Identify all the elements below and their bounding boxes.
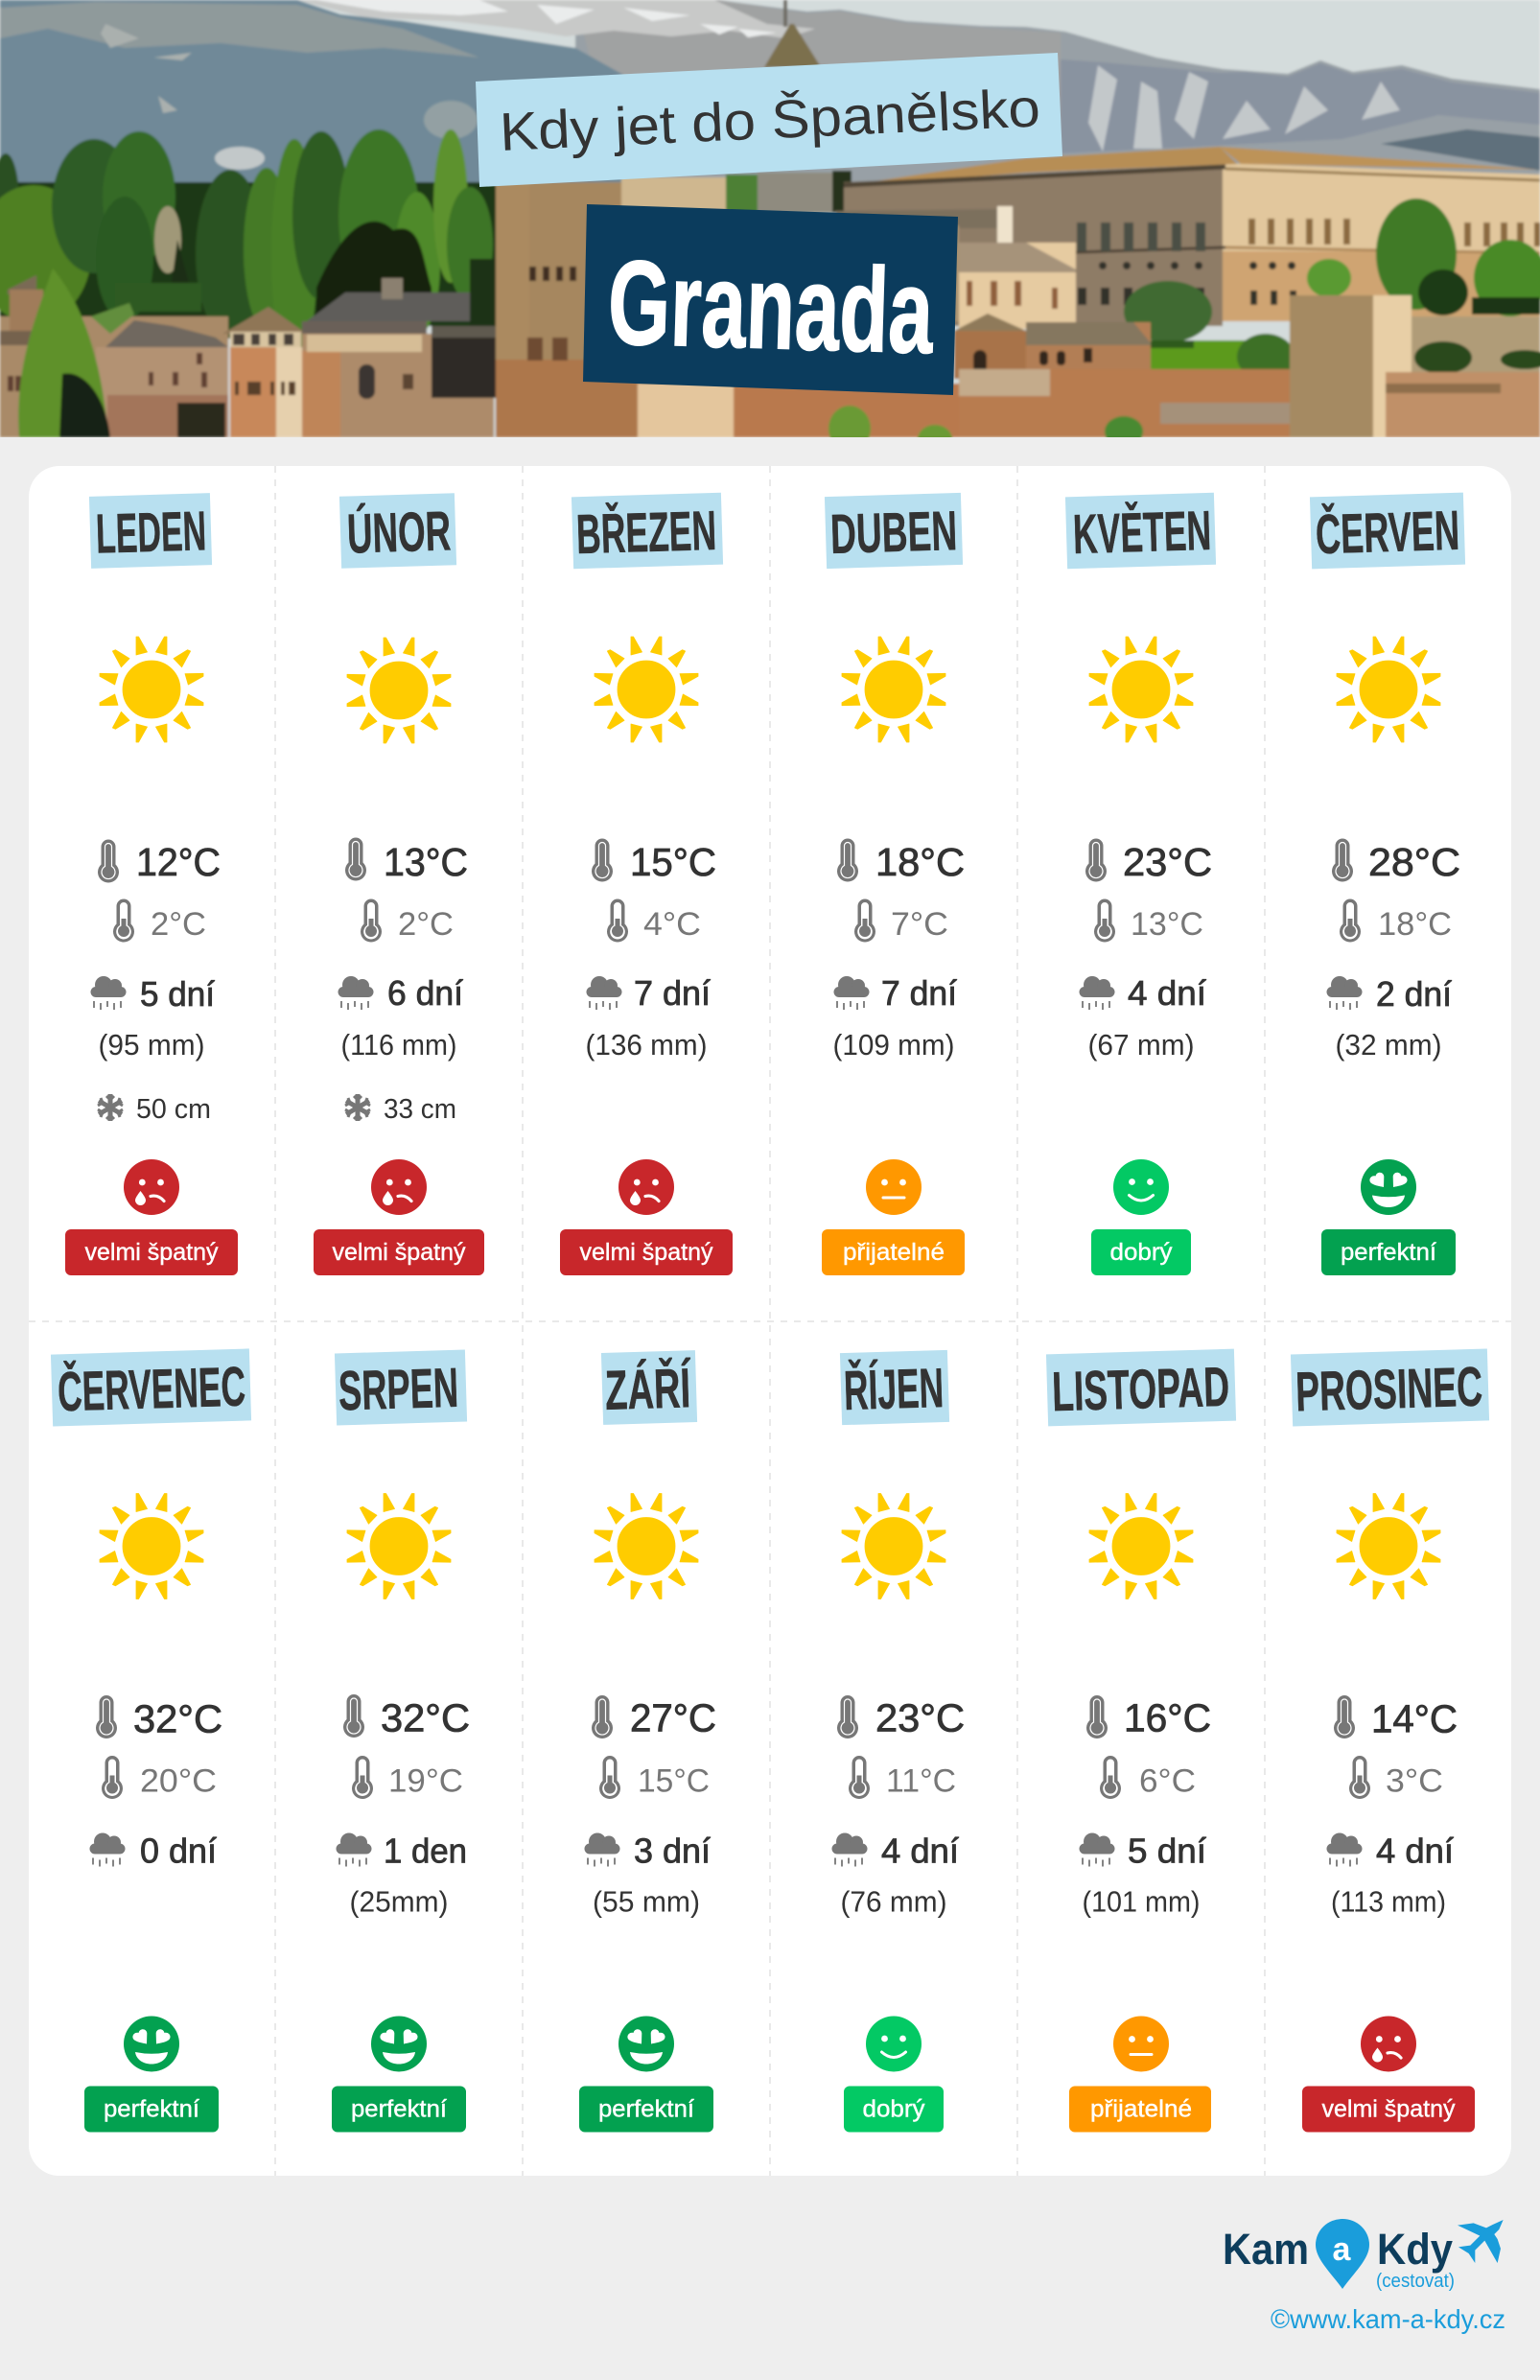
icon: sad face [371,1159,427,1215]
icon: thermometer low [599,1756,620,1799]
snowfall: 50 cm [136,1094,211,1125]
rain days: 7 dní [634,973,711,1013]
icon: thermometer high [837,838,858,882]
icon: thermometer low [849,1756,870,1799]
rating badge: velmi špatný [332,1239,466,1266]
low temperature: 20°C [140,1762,217,1799]
icon: rain cloud [1080,976,1114,1010]
month: únor [314,493,484,1275]
month: srpen [332,1349,470,2133]
high temperature: 18°C [875,840,965,884]
low temperature: 6°C [1139,1762,1196,1799]
icon: thermometer high [592,838,613,882]
icon: sad face [1361,2016,1416,2071]
precipitation: (55 mm) [593,1885,700,1918]
precipitation: (113 mm) [1331,1885,1446,1918]
month label: ÚNOR: ÚNOR [346,500,452,566]
month: prosinec [1291,1348,1489,2133]
icon: sun [595,637,698,742]
precipitation: (67 mm) [1087,1028,1195,1062]
icon: thermometer low [1349,1756,1370,1799]
month: duben [822,493,965,1275]
icon: thermometer high [345,838,366,881]
icon: rain cloud [338,976,374,1010]
rating badge: velmi špatný [579,1239,713,1266]
precipitation: (76 mm) [840,1885,947,1918]
icon: rain cloud [90,976,127,1010]
rating badge: perfektní [1341,1239,1436,1266]
month label: KVĚTEN [1065,493,1216,569]
precipitation: (95 mm) [98,1028,205,1062]
month: říjen [832,1350,965,2133]
month label: ZÁŘÍ [601,1350,697,1425]
icon: airplane [1458,2220,1504,2263]
low temperature: 15°C [638,1762,710,1799]
month label: ZÁŘÍ: ZÁŘÍ [604,1357,692,1422]
high temperature: 23°C [875,1695,965,1739]
rating badge: přijatelné [1090,2096,1192,2123]
month: červen [1310,493,1465,1275]
month: leden [65,493,238,1275]
icon: smiling face [866,2016,922,2071]
icon: sun [1089,637,1193,742]
icon: thermometer low [1094,899,1115,943]
rain days: 4 dní [881,1832,959,1870]
icon: location pin: a [1333,2231,1352,2268]
rating badge: přijatelné [843,1239,945,1266]
rating badge: perfektní [351,2096,447,2123]
icon: rain cloud [832,1833,867,1866]
precipitation: (109 mm) [832,1028,955,1062]
rain days: 3 dní [634,1832,711,1870]
rating badge [1302,2087,1475,2133]
rating badge [65,1229,238,1275]
month: březen [560,493,733,1275]
low temperature: 4°C [643,906,701,943]
icon: thermometer low [352,1756,373,1799]
rain days: 4 dní [1376,1832,1454,1870]
high temperature: 32°C [381,1695,470,1739]
month label: ŘÍJEN [840,1350,949,1425]
logo subtitle: (cestovat) [1376,2271,1455,2292]
icon: snowflake [345,1094,370,1121]
logo: Kam a Kdy [1223,2219,1505,2334]
rain days: 5 dní [1128,1832,1206,1870]
rain days: 6 dní [387,973,463,1013]
high temperature: 14°C [1371,1697,1458,1741]
icon: sun [347,638,451,743]
rain days: 1 den [384,1832,467,1870]
rating badge [1091,1229,1191,1275]
icon: thermometer low [1100,1756,1121,1799]
icon: sun [100,637,203,742]
icon: neutral face [866,1159,922,1215]
rating badge: velmi špatný [84,1239,219,1266]
rating badge: dobrý [1110,1239,1173,1266]
icon: sad face [618,1159,674,1215]
title banner: Kdy jet do Španělsko: Kdy jet do Španělsko [499,77,1041,162]
rain days: 5 dní [140,974,215,1014]
month: červenec [51,1348,251,2133]
icon: sun [1089,1494,1193,1599]
icon: rain cloud [1327,976,1362,1010]
rating badge: perfektní [598,2096,694,2123]
low temperature: 2°C [398,906,454,943]
icon: sun [1337,1494,1440,1599]
icon: thermometer low [854,899,875,943]
second row of months [51,1348,1489,2133]
low temperature: 11°C [886,1762,956,1799]
icon: sun [842,1494,945,1599]
high temperature: 16°C [1124,1695,1211,1739]
precipitation: (116 mm) [341,1028,456,1062]
icon: heart-eyes face [371,2016,427,2071]
panel: month grid card [29,466,1511,2176]
icon: rain cloud [1327,1833,1362,1866]
high temperature: 13°C [384,840,468,884]
low temperature: 2°C [151,906,206,943]
icon: smiling face [1113,1159,1169,1215]
high temperature: 27°C [630,1695,716,1739]
month label: ŘÍJEN: ŘÍJEN [843,1357,945,1422]
icon: location pin [1316,2219,1369,2289]
low temperature: 7°C [891,906,948,943]
rain days: 7 dní [881,973,957,1013]
month label: SRPEN [335,1349,467,1426]
icon: sun [842,637,945,742]
icon: thermometer high [96,1695,117,1738]
rating badge [560,1229,733,1275]
month label: LISTOPAD: LISTOPAD [1051,1356,1230,1423]
low temperature: 3°C [1386,1762,1443,1799]
icon: thermometer high [837,1695,858,1738]
month label: ČERVEN [1310,493,1465,569]
month: květen [1065,493,1216,1275]
icon: rain cloud [1080,1833,1114,1866]
icon: thermometer high [592,1695,613,1738]
icon: sun [347,1494,451,1599]
month label: LISTOPAD [1046,1349,1236,1426]
month label: LEDEN [89,493,212,569]
precipitation: (136 mm) [585,1028,708,1062]
icon: thermometer low [607,899,628,943]
snowfall: 33 cm [384,1094,456,1125]
icon: sad face [124,1159,179,1215]
icon: thermometer low [361,899,382,943]
high temperature: 32°C [133,1697,222,1741]
month label: SRPEN: SRPEN [338,1357,459,1422]
icon: neutral face [1113,2016,1169,2071]
rating badge: dobrý [863,2096,925,2123]
rating badge [844,2087,944,2133]
icon: sun [595,1494,698,1599]
rain days: 2 dní [1376,974,1452,1014]
month label: ČERVENEC: ČERVENEC [57,1356,246,1423]
icon: thermometer high [1086,1695,1108,1738]
high temperature: 12°C [136,840,221,884]
rating badge [579,2087,713,2133]
precipitation: (101 mm) [1082,1885,1201,1918]
icon: thermometer low [113,899,134,943]
month label: LEDEN: LEDEN [95,500,207,566]
icon: heart-eyes face [618,2016,674,2071]
rain days: 4 dní [1128,973,1206,1013]
month label: BŘEZEN [572,493,723,569]
high temperature: 23°C [1123,840,1212,884]
icon: sun [1337,637,1440,742]
city banner: Granada [583,204,958,395]
icon: thermometer high [1334,1695,1355,1738]
icon: thermometer high [1085,838,1107,882]
logo text: Kdy: Kdy [1377,2225,1453,2274]
low temperature: 19°C [388,1762,463,1799]
icon: sun [100,1494,203,1599]
icon: thermometer high [1332,838,1353,882]
header photo: Alhambra with mountains [0,0,1540,454]
icon: rain cloud [587,976,621,1010]
icon: rain cloud [336,1833,372,1866]
icon: thermometer low [102,1756,123,1799]
month: listopad [1046,1349,1236,2133]
month label: BŘEZEN: BŘEZEN [575,500,717,566]
website url: ©www.kam-a-kdy.cz [1271,2304,1505,2334]
precipitation: (25mm) [349,1885,449,1918]
month label: KVĚTEN: KVĚTEN [1072,500,1212,566]
icon: heart-eyes face [1361,1159,1416,1215]
rating badge: perfektní [104,2096,199,2123]
icon: snowflake [98,1094,123,1121]
rating badge: velmi špatný [1321,2096,1456,2123]
rating badge [1321,1229,1456,1275]
high temperature: 15°C [630,840,716,884]
month label: DUBEN [825,493,963,569]
month label: ÚNOR [339,493,456,569]
low temperature: 13°C [1131,906,1203,943]
rating badge [1069,2087,1211,2133]
high temperature: 28°C [1368,840,1460,884]
month label: DUBEN: DUBEN [829,500,958,566]
rating badge [314,1229,484,1275]
city banner: Granada: Granada [606,236,936,379]
icon: thermometer low [1340,899,1361,943]
icon: rain cloud [834,976,869,1010]
precipitation: (32 mm) [1335,1028,1442,1062]
rain days: 0 dní [140,1832,217,1870]
rating badge [332,2087,466,2133]
month: září [579,1350,716,2133]
rating badge [84,2087,219,2133]
title banner: Kdy jet do Španělsko [476,53,1062,187]
low temperature: 18°C [1378,906,1452,943]
icon: thermometer high [98,840,119,883]
rating badge [822,1229,965,1275]
month label: ČERVENEC [51,1348,251,1427]
icon: rain cloud [585,1833,619,1866]
logo text: Kam: Kam [1223,2225,1309,2274]
icon: heart-eyes face [124,2016,179,2071]
icon: rain cloud [90,1833,125,1866]
icon: thermometer high [343,1694,364,1738]
